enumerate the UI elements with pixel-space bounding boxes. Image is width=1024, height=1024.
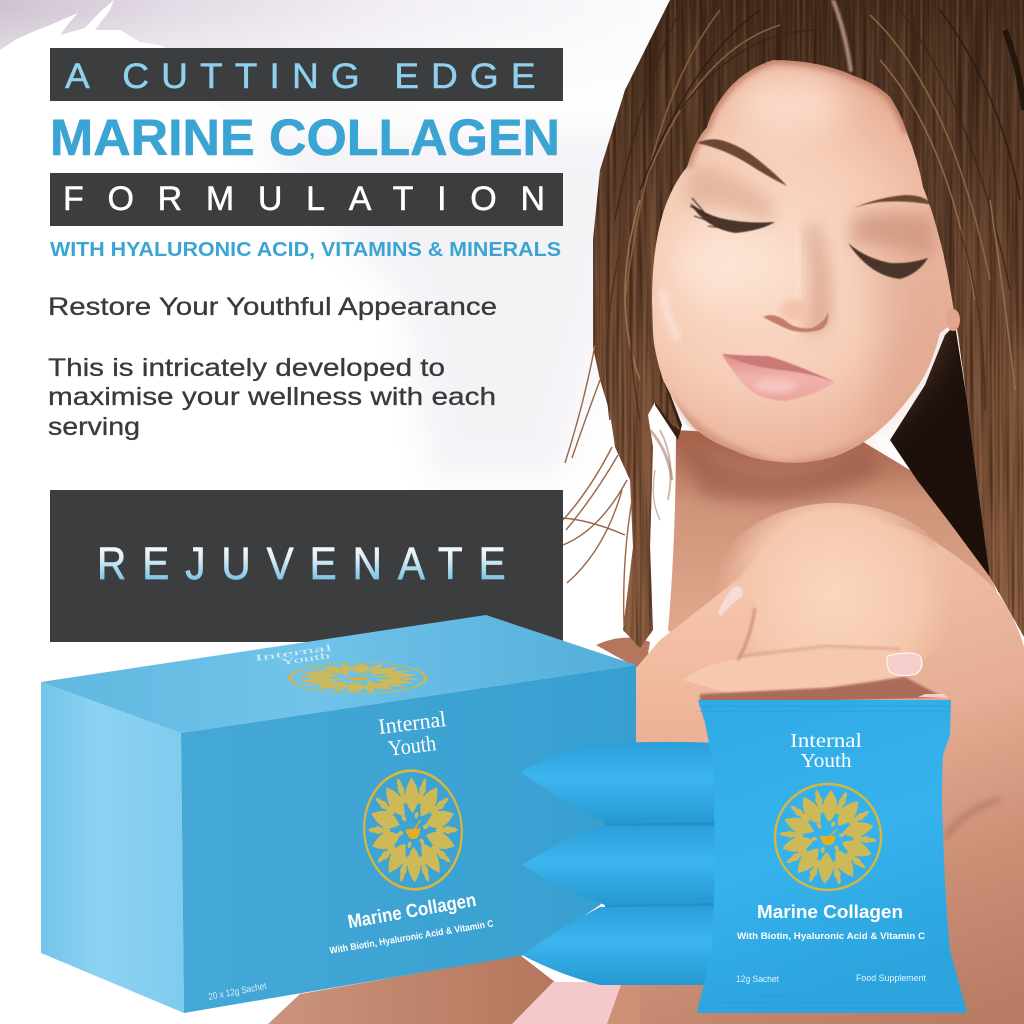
part line <box>833 0 851 72</box>
headline bar: FORMULATION <box>50 173 563 226</box>
sachet mandala <box>775 784 881 890</box>
shoulder ridge shade <box>735 520 935 580</box>
arm and shoulder <box>640 522 1024 1024</box>
hairline shadow <box>687 60 907 167</box>
carton size text: 20 x 12g Sachet <box>207 981 268 1003</box>
hair shadow behind neck <box>890 325 990 577</box>
sachet size text: 12g Sachet <box>736 974 779 984</box>
carton product name: With Biotin, Hyaluronic Acid & Vitamin C <box>329 918 494 957</box>
nose shadow <box>805 220 831 335</box>
neck shadow <box>680 440 885 503</box>
headline bar: FORMULATION: FORMULATION <box>63 180 545 218</box>
skin right of garment <box>600 982 700 1024</box>
text block: description: This is intricately developed to <box>48 354 445 382</box>
carton product name <box>329 890 494 957</box>
product: front sachet <box>697 700 967 1013</box>
carton top face <box>41 615 636 733</box>
text block: description: serving <box>48 413 140 441</box>
sachet logo text <box>790 730 862 772</box>
garment <box>512 982 622 1024</box>
carton front face <box>181 665 636 1013</box>
product: carton <box>41 615 636 1013</box>
background lilac brush wash <box>0 0 680 480</box>
right cheek shadow <box>860 210 950 445</box>
shoulder highlight <box>710 503 960 687</box>
text block: description: maximise your wellness with each <box>48 383 496 411</box>
eyebrows <box>697 139 787 186</box>
carton mandala <box>359 767 467 893</box>
carton left face <box>41 682 184 1013</box>
eye shadows <box>685 165 775 225</box>
carton top face: Internal <box>254 642 333 663</box>
cheek and forehead highlight <box>675 227 765 303</box>
main hair <box>593 0 1024 648</box>
text block: description <box>48 354 496 441</box>
sachet supplement text: Food Supplement <box>856 973 926 983</box>
ear <box>946 309 960 331</box>
panel: rejuvenate: REJUVENATE <box>97 539 506 590</box>
headline: MARINE COLLAGEN: MARINE COLLAGEN <box>50 109 560 166</box>
hair wisps lower left <box>563 345 672 625</box>
sachet ingredients: With Biotin, Hyaluronic Acid & Vitamin C <box>737 931 925 942</box>
headline bar: A CUTTING EDGE <box>50 48 563 101</box>
sachet logo text: Youth <box>800 750 852 772</box>
carton product name: Marine Collagen <box>346 890 478 933</box>
sub-headline: WITH HYALURONIC ACID, VITAMINS & MINERALS <box>50 239 561 261</box>
neck <box>668 430 1000 660</box>
far shoulder <box>596 638 650 672</box>
nose <box>763 312 828 332</box>
hand <box>636 583 950 745</box>
product: stacked sachets <box>520 742 716 985</box>
armpit crease <box>945 800 1000 838</box>
carton logo text: Internal <box>377 706 447 739</box>
chin shading <box>665 385 880 470</box>
face <box>652 60 957 463</box>
eyelashes <box>690 198 928 279</box>
sachet product name: Marine Collagen <box>757 902 903 922</box>
photo: woman <box>268 0 1024 1024</box>
carton top face: Youth <box>280 650 332 667</box>
fingernails <box>887 653 922 676</box>
sachet logo text: Internal <box>790 730 862 752</box>
carton logo text <box>377 706 447 761</box>
lips <box>722 354 835 401</box>
panel: rejuvenate <box>50 490 563 642</box>
dark under-jaw wedge <box>652 340 682 440</box>
text block: restore your youthful appearance: Restore Your Youthful Appearance <box>48 293 497 321</box>
carton logo text: Youth <box>387 730 437 761</box>
headline bar: A CUTTING EDGE: A CUTTING EDGE <box>65 56 536 96</box>
forearm lower <box>268 955 560 1024</box>
hair strands <box>607 10 1024 420</box>
